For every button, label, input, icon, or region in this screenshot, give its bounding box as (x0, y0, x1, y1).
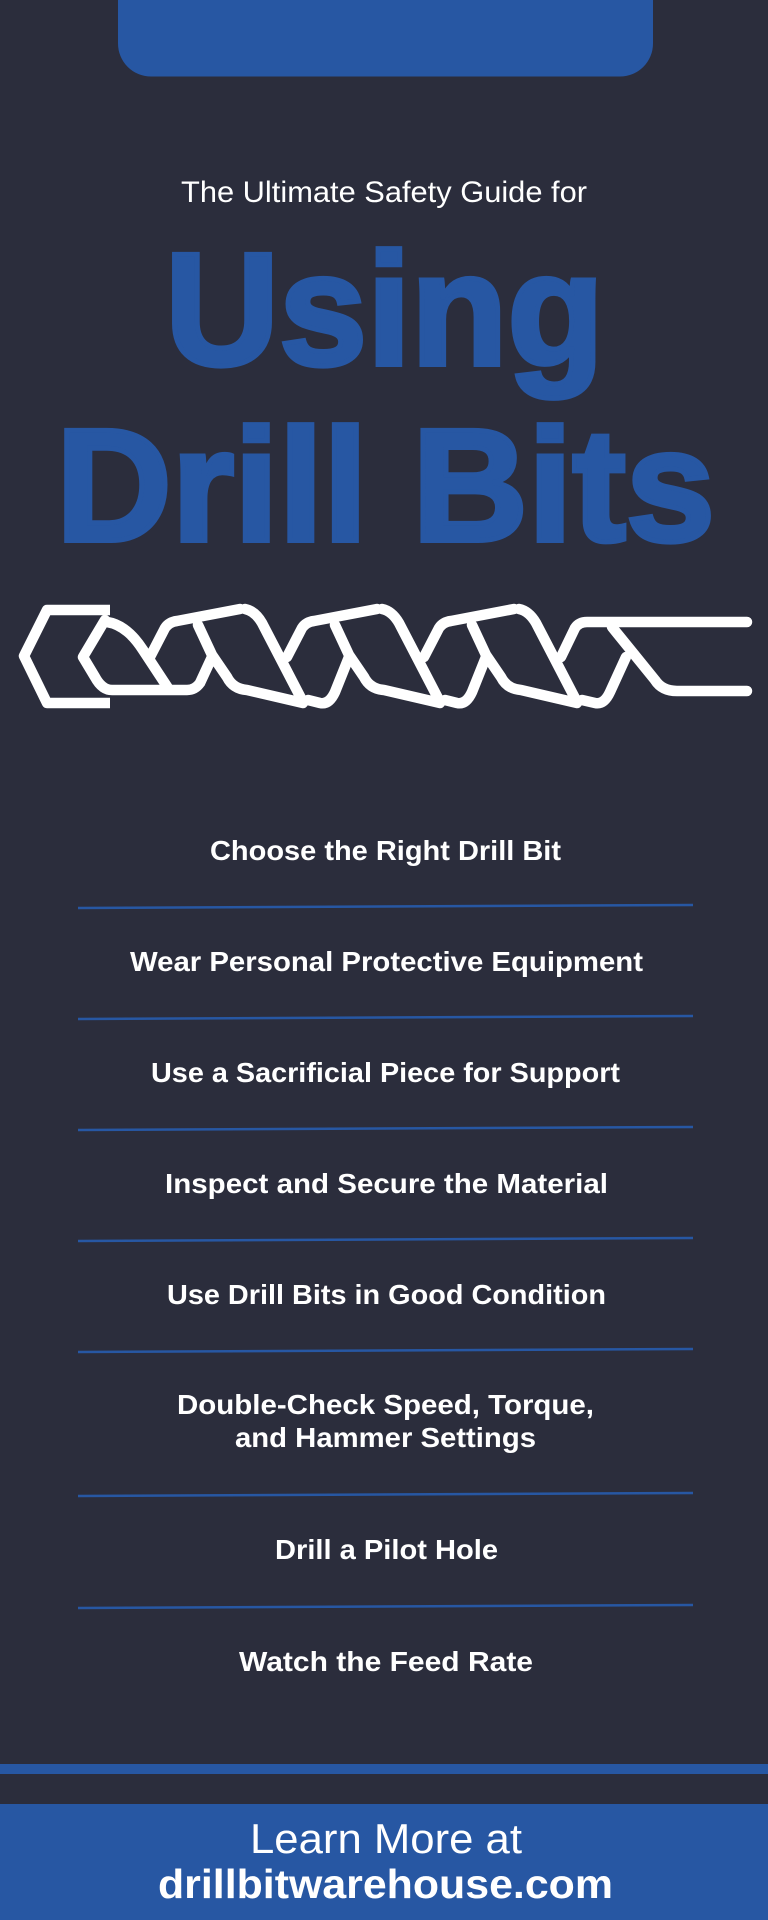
item: double-check speed, torque, and hammer settings: and Hammer Settings (235, 1422, 536, 1453)
item: double-check speed, torque, and hammer settings: Double-Check Speed, Torque, (177, 1389, 594, 1420)
icon: drill bit (24, 609, 747, 703)
footer text: learn more at: Learn More at (250, 1815, 522, 1862)
item: double-check speed, torque, and hammer settings (177, 1389, 594, 1453)
item: inspect and secure the material: Inspect and Secure the Material (165, 1168, 608, 1199)
top blue tab (118, 0, 653, 76)
item: use drill bits in good condition: Use Drill Bits in Good Condition (167, 1279, 606, 1310)
subtitle: The Ultimate Safety Guide for (181, 176, 587, 209)
title: Drill Bits (56, 396, 715, 574)
item: use a sacrificial piece for support: Use a Sacrificial Piece for Support (151, 1057, 620, 1088)
footer panel (0, 1804, 768, 1920)
footer text: website: drillbitwarehouse.com (158, 1861, 613, 1907)
item: drill a pilot hole: Drill a Pilot Hole (275, 1534, 498, 1565)
item: choose the right drill bit: Choose the Right Drill Bit (210, 835, 561, 866)
footer stripe (0, 1764, 768, 1774)
item: watch the feed rate: Watch the Feed Rate (239, 1646, 533, 1677)
item: wear personal protective equipment: Wear Personal Protective Equipment (130, 946, 643, 977)
title: Using (165, 220, 604, 398)
title (56, 220, 715, 574)
